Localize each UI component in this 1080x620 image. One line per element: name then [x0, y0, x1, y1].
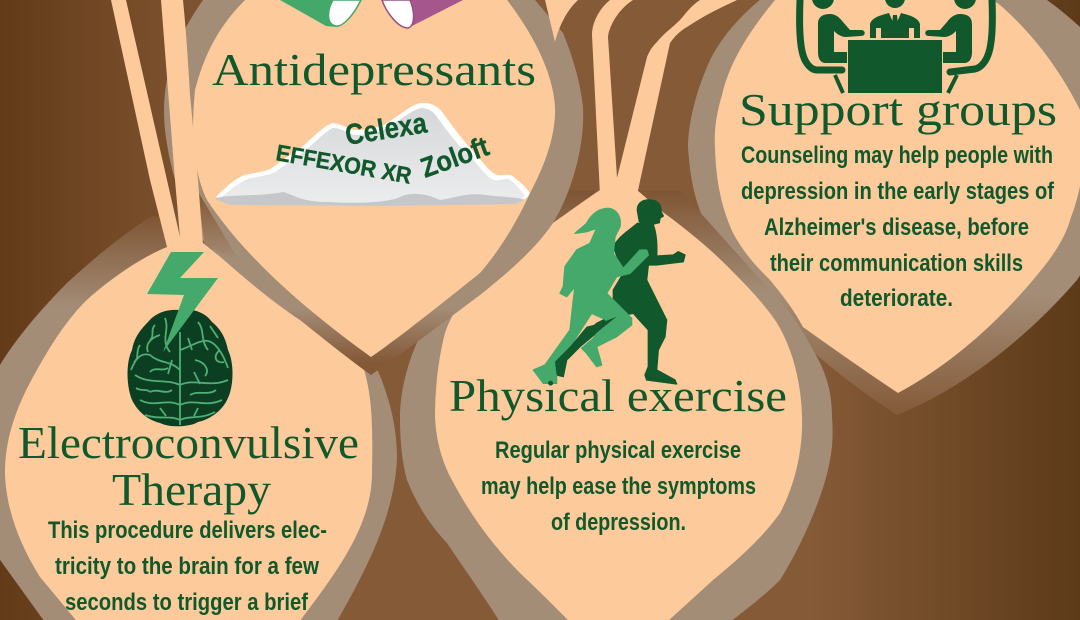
text: physical exercise description	[481, 437, 756, 536]
panel: physical exercise	[400, 190, 833, 620]
text: physical exercise description: of depression.	[551, 509, 686, 536]
icon: purple capsule	[382, 0, 463, 28]
panel: support groups	[715, 0, 1080, 393]
antidepressants ring	[164, 0, 583, 375]
heading: electroconvulsive therapy: Therapy	[112, 464, 271, 515]
text: physical exercise description: may help ease the symptoms	[481, 473, 756, 500]
text: support groups description: deteriorate.	[840, 285, 953, 312]
icon: powder mound with drug names	[215, 103, 530, 206]
support drop	[715, 0, 1080, 393]
panel: antidepressants	[164, 0, 583, 375]
exercise ring	[400, 190, 833, 620]
text: support groups description	[741, 142, 1055, 312]
label: Zoloft: Zoloft	[416, 131, 493, 184]
text: electroconvulsive description: tricity to the brain for a few	[55, 553, 319, 580]
runner: woman	[533, 208, 648, 383]
heading: electroconvulsive therapy: Electroconvulsive	[18, 417, 359, 468]
text: support groups description: Alzheimer's disease, before	[764, 214, 1029, 241]
text: physical exercise description: Regular physical exercise	[495, 437, 741, 464]
text: support groups description: their communication skills	[770, 250, 1023, 277]
icon: meeting at a table	[800, 0, 992, 93]
ring shadow near the stem	[197, 190, 240, 262]
runner: man	[555, 200, 685, 384]
label: Effexor XR: EFFEXOR XR	[274, 139, 414, 189]
heading: antidepressants: Antidepressants	[212, 44, 536, 95]
heading: support groups: Support groups	[739, 84, 1057, 135]
heading: physical exercise: Physical exercise	[449, 370, 787, 421]
stem: electroconvulsive strands	[111, 0, 203, 247]
exercise drop	[435, 190, 802, 620]
label: Celexa: Celexa	[343, 107, 430, 152]
icon: green capsule	[280, 0, 361, 27]
heading: electroconvulsive therapy	[18, 417, 359, 515]
antidepressants drop	[193, 0, 555, 357]
panel: electroconvulsive therapy	[0, 210, 397, 620]
electroconvulsive ring	[0, 210, 397, 620]
text: electroconvulsive description: This procedure delivers elec-	[48, 517, 327, 544]
stem: antidepressants wedge	[545, 0, 578, 42]
text: electroconvulsive description	[48, 517, 327, 616]
icon: runners	[533, 200, 685, 384]
text: electroconvulsive description: seconds to trigger a brief	[65, 589, 309, 616]
icon: brain	[128, 310, 232, 426]
icon: lightning bolt	[147, 252, 218, 352]
electroconvulsive drop	[5, 243, 372, 620]
support ring	[688, 0, 1080, 415]
runner: trailing leg	[555, 317, 617, 377]
stem: exercise strands	[592, 0, 737, 195]
